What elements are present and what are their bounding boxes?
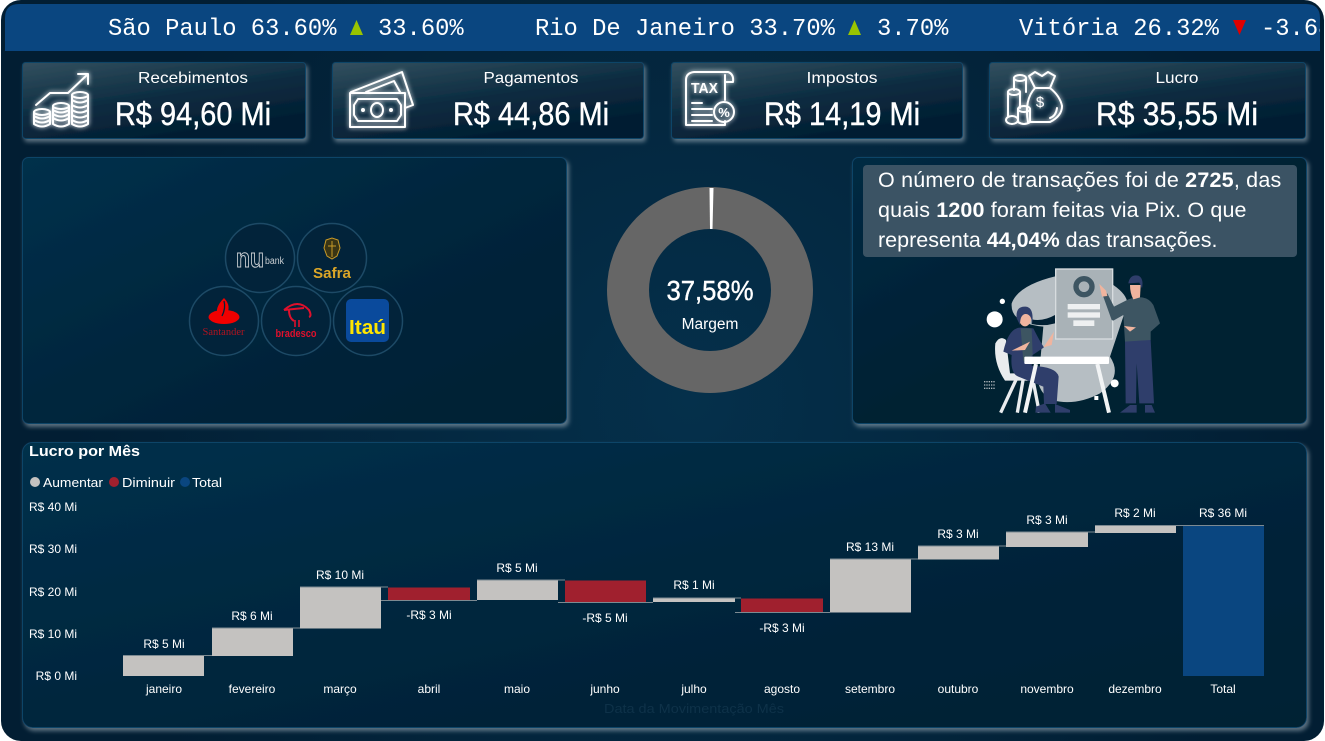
bar value labels: -R$ 3 Mi (759, 621, 805, 635)
icon: money bag: $ (1036, 94, 1045, 111)
donut label: Margem (682, 316, 738, 333)
x axis labels: outubro (938, 682, 979, 696)
value: R$ 44,86 Mi (453, 96, 609, 132)
callout: quais 1200 foram feitas via Pix. O que (878, 198, 1247, 222)
label: Lucro (1156, 70, 1199, 87)
KPI card: Pagamentos (332, 62, 644, 138)
y axis labels: R$ 10 Mi (29, 627, 77, 641)
ticker: Rio De Janeiro: 3.70% (877, 16, 949, 43)
callout: O número de transações foi de 2725, das (878, 168, 1281, 192)
value: R$ 35,55 Mi (1096, 96, 1258, 132)
bar value labels (143, 506, 1247, 651)
legend: Diminuir (122, 475, 176, 490)
donut chart: margem (628, 188, 792, 372)
x axis labels: Total (1210, 682, 1236, 696)
waterfall chart bars (123, 526, 1264, 676)
x axis labels: junho (589, 682, 620, 696)
bar value labels: R$ 1 Mi (673, 578, 715, 592)
callout: representa 44,04% das transações. (878, 228, 1217, 252)
KPI card: Lucro (990, 62, 1306, 138)
y axis labels: R$ 20 Mi (29, 585, 77, 599)
illustration: two people at a table with a board (984, 268, 1160, 414)
x axis labels: agosto (764, 682, 800, 696)
ticker: São Paulo: 33.60% (378, 16, 464, 43)
chart title: Lucro por Mês (29, 443, 140, 460)
bar value labels: R$ 10 Mi (316, 568, 364, 582)
ticker band (5, 4, 1325, 51)
ticker: São Paulo (108, 16, 464, 43)
y axis labels (29, 500, 77, 683)
legend: Total (192, 475, 222, 490)
label: Pagamentos (484, 70, 578, 87)
ticker: Vitória (1019, 16, 1325, 43)
value: R$ 94,60 Mi (115, 96, 271, 132)
donut value: 37,58% (666, 275, 754, 306)
bar value labels: R$ 3 Mi (937, 527, 979, 541)
logo: Safra: Safra (313, 265, 352, 282)
y axis labels: R$ 0 Mi (36, 669, 77, 683)
logo: Itaú: Itaú (349, 317, 386, 339)
x axis labels: janeiro (145, 682, 182, 696)
legend: Aumentar (43, 475, 104, 490)
logo: Nubank (226, 224, 294, 292)
label: Impostos (806, 70, 878, 87)
icon: tax document: % (718, 105, 730, 120)
x axis labels: setembro (845, 682, 895, 696)
legend (30, 475, 222, 490)
icon: money bag (1006, 72, 1062, 124)
x axis labels (145, 682, 1236, 696)
x axis labels: fevereiro (229, 682, 276, 696)
ticker: Vitória: Vitória 26.32% (1019, 16, 1220, 43)
bar value labels: R$ 2 Mi (1114, 506, 1156, 520)
bar value labels: R$ 5 Mi (143, 637, 185, 651)
panel: transactions (852, 158, 1306, 424)
panel: banks (22, 158, 566, 424)
logo: Nubank: nu (236, 243, 264, 273)
KPI card: Impostos (672, 62, 962, 138)
x axis title: Data da Movimentação Mês (604, 701, 785, 716)
logo: Itaú (334, 286, 402, 356)
logo: Nubank: bank (265, 256, 285, 267)
x axis labels: dezembro (1108, 682, 1162, 696)
y axis labels: R$ 40 Mi (29, 500, 77, 514)
label: Recebimentos (138, 70, 248, 87)
bar value labels: R$ 36 Mi (1199, 506, 1247, 520)
callout (863, 165, 1297, 257)
x axis labels: maio (504, 682, 530, 696)
x axis labels: julho (680, 682, 707, 696)
bar value labels: R$ 6 Mi (231, 609, 273, 623)
icon: rising coins (34, 74, 88, 126)
x axis labels: abril (418, 682, 440, 696)
icon: tax document: TAX (691, 80, 718, 97)
ticker: São Paulo: São Paulo 63.60% (108, 16, 337, 43)
logo: Safra (298, 224, 366, 292)
logo: Bradesco (262, 286, 330, 356)
value: R$ 14,19 Mi (764, 96, 920, 132)
ticker: Rio De Janeiro: Rio De Janeiro 33.70% (535, 16, 836, 43)
icon: tax document (686, 72, 734, 125)
y axis labels: R$ 30 Mi (29, 542, 77, 556)
bar value labels: R$ 5 Mi (496, 561, 538, 575)
logo: Santander: Santander (202, 327, 245, 338)
logo: Santander (190, 286, 258, 356)
panel: Lucro por Mês (22, 442, 1306, 728)
logo: Bradesco: bradesco (276, 328, 317, 340)
bar value labels: R$ 3 Mi (1026, 513, 1068, 527)
bar value labels: -R$ 3 Mi (406, 608, 452, 622)
icon: banknotes (350, 72, 413, 127)
KPI card: Recebimentos (22, 62, 306, 138)
x axis labels: novembro (1020, 682, 1074, 696)
x axis labels: março (323, 682, 357, 696)
bar value labels: -R$ 5 Mi (582, 611, 628, 625)
bar value labels: R$ 13 Mi (846, 540, 894, 554)
